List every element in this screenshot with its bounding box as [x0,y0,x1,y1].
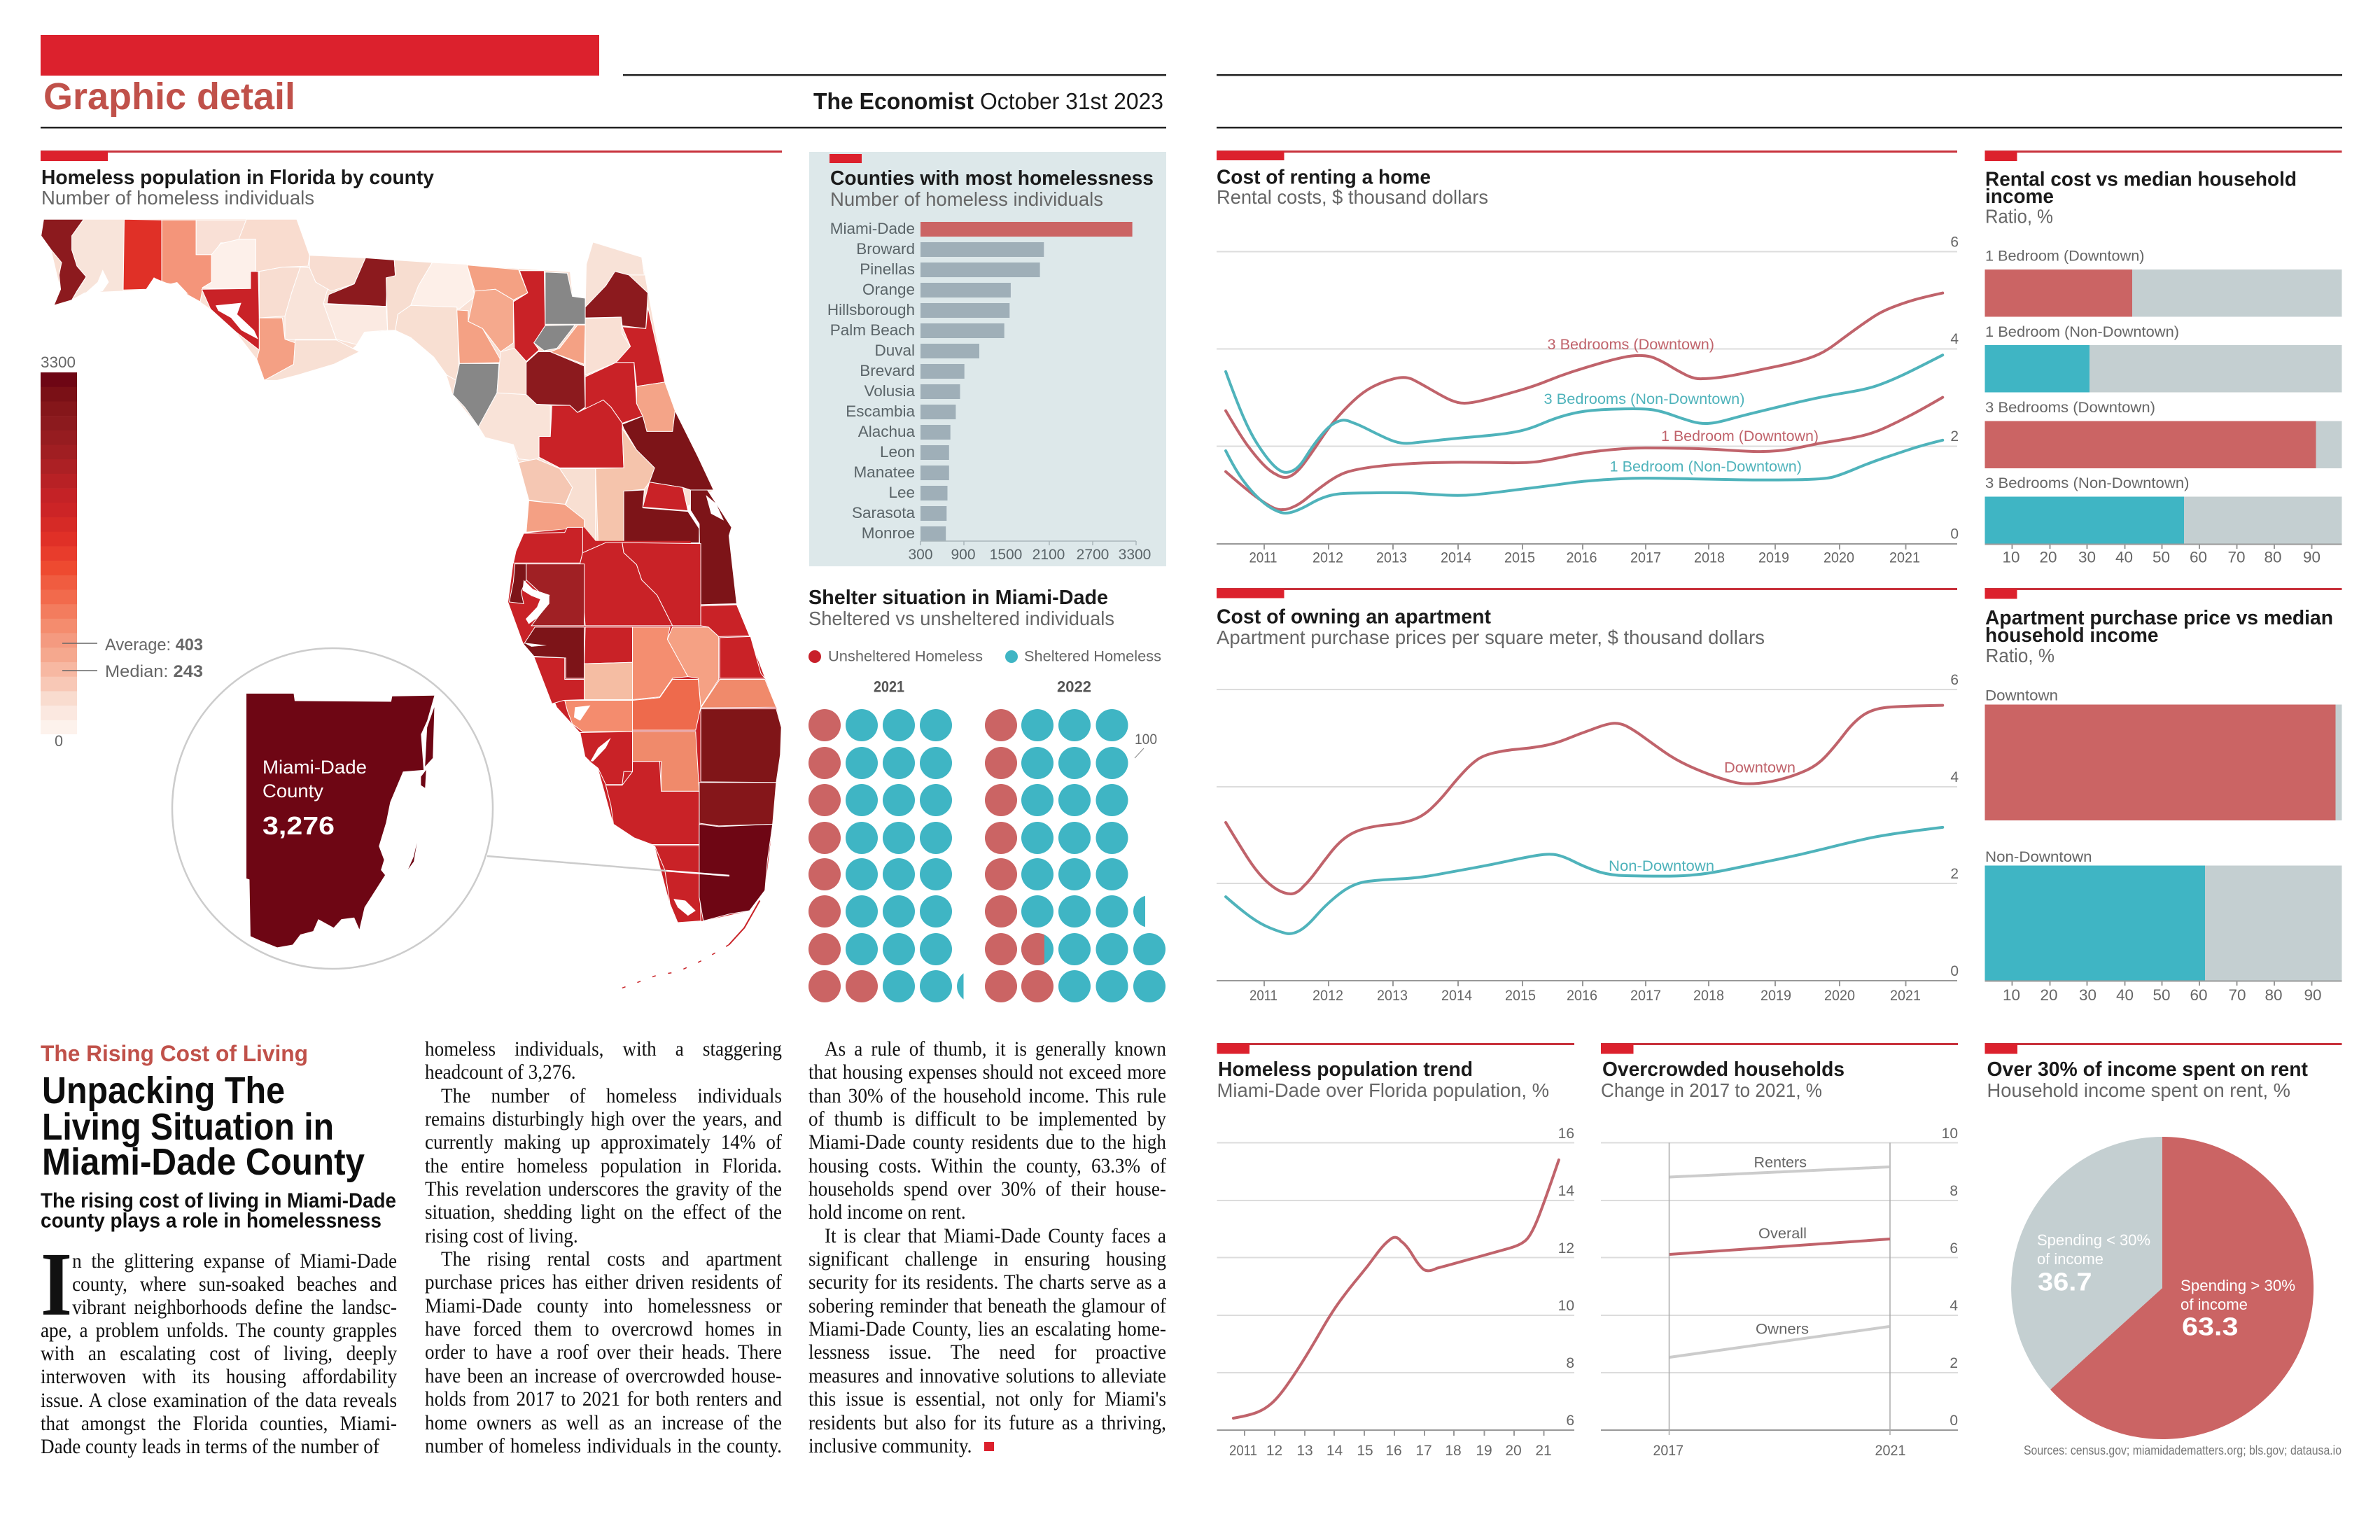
subheading: pie: Household income spent on rent, % [1987,1079,2290,1101]
stacked bars: rental ratio: 10 [2002,549,2020,566]
panel: homeless population trend [1217,1043,1574,1459]
headline: Unpacking The [42,1070,285,1112]
line chart: owning: 2016 [1567,988,1597,1004]
article column 1: county, where sun-soaked beaches and [72,1273,397,1296]
bar chart: counties: Miami-Dade [830,220,915,237]
article column 2: This revelation underscores the gravity of the [424,1178,781,1200]
panel: shelter situation [808,587,1166,1002]
bar chart: counties: Orange [862,281,915,298]
bar chart: counties: 1500 [990,547,1022,563]
slope chart: overcrowded: 2021 [1875,1443,1905,1459]
dot chart: 2022 [985,678,1166,1002]
panel: counties with most homelessness [809,152,1166,566]
slope chart: overcrowded: 2 [1949,1355,1958,1371]
article column 3 [808,1038,1166,1457]
article column 3: housing costs. Within the county, 63.3% of [808,1155,1166,1177]
heading: counties: Counties with most homelessness [830,167,1154,190]
callout text: Miami-Dade [262,757,367,778]
dot chart: 2021 [808,678,963,1002]
line chart: trend: 18 [1445,1443,1462,1459]
stacked bars: rental ratio [1985,248,2342,566]
line chart: renting: 2015 [1504,550,1535,566]
article column 2: holds from 2017 to 2021 for both renters and [424,1388,781,1410]
pie chart: Spending > 30% [2180,1277,2295,1294]
pie chart: 63.3 [2182,1312,2239,1341]
panel: cost of owning [1217,588,1959,1004]
line chart: renting: 2013 [1376,550,1407,566]
article column 1: interwoven with its housing affordability [41,1366,397,1388]
line chart: trend: 16 [1385,1443,1402,1459]
line chart: trend [1217,1126,1574,1459]
legend: median: Median: 243 [105,662,203,681]
line chart: renting: 2019 [1758,550,1789,566]
subheading: renting: Rental costs, $ thousand dollars [1217,186,1488,208]
stacked bars: apartment ratio [1985,687,2342,1004]
subheading: trend: Miami-Dade over Florida population, % [1217,1079,1549,1101]
line chart: trend: 19 [1476,1443,1492,1459]
article column 3: significant challenge in ensuring housing [808,1248,1166,1270]
line chart: renting: 1 Bedroom (Downtown) [1661,428,1819,444]
slope chart: overcrowded: 6 [1949,1240,1958,1256]
heading: shelter: Shelter situation in Miami-Dade [808,587,1108,609]
line chart: trend: 8 [1566,1355,1574,1371]
sources: Sources: census.gov; miamidadematters.org; bls.gov; datausa.io [2024,1443,2342,1457]
line chart: owning: 4 [1950,769,1959,785]
panel: Florida map [41,150,782,992]
line chart: owning: 2017 [1630,988,1661,1004]
panel: rental cost vs income [1985,150,2342,566]
bar chart: counties: Broward [856,240,915,258]
article column 2: remains disturbingly high over the years, and [424,1108,781,1130]
callout: Miami-Dade inset [172,648,729,969]
panel: rental cost vs income: income [1985,186,2054,208]
article column 2: number of homeless individuals in the county. [424,1435,781,1457]
article column 2: the entire homeless population in Florida. [424,1155,781,1177]
slope chart: overcrowded: Owners [1756,1322,1809,1337]
standfirst: The rising cost of living in Miami-Dade [41,1189,396,1212]
line chart: owning: 2018 [1693,988,1724,1004]
stacked bars: rental ratio: 3 Bedrooms (Non-Downtown) [1985,475,2190,491]
slope chart: overcrowded: 10 [1942,1126,1958,1142]
article column 2: have forced them to overcrowd homes in [424,1318,781,1340]
article column 3: sobering reminder that beneath the glamour of [808,1295,1166,1317]
bar chart: counties: 3300 [1119,547,1151,563]
stacked bars: apartment ratio: Downtown [1985,687,2058,704]
line chart: renting: 3 Bedrooms (Downtown) [1547,337,1714,353]
pie chart: 36.7 [2038,1267,2092,1296]
line chart: trend: 12 [1558,1240,1574,1256]
line chart: owning: 2021 [1890,988,1921,1004]
bar chart: counties: Brevard [860,362,915,379]
legend: shelter: Sheltered Homeless [1024,648,1161,665]
headline: Living Situation in [42,1106,334,1148]
subheading: apartment ratio: Ratio, % [1985,645,2054,666]
bar chart: counties: Sarasota [852,504,915,522]
line chart: owning: 2014 [1441,988,1472,1004]
end mark [984,1442,994,1451]
bar chart: counties: Hillsborough [827,301,915,318]
masthead red bar [41,35,599,76]
line chart: renting: 2012 [1312,550,1343,566]
icon: Miami-Dade county shape [246,694,434,947]
article column 3: It is clear that Miami-Dade County faces a [825,1225,1166,1247]
panel: cost of renting [1217,150,1959,566]
stacked bars: rental ratio: 50 [2152,549,2170,566]
bar chart: counties: Escambia [846,402,915,420]
panel: apartment price vs income [1985,588,2342,1004]
article column 3: measures and innovative solutions to alleviate [808,1365,1166,1387]
line chart: renting: 1 Bedroom (Non-Downtown) [1610,459,1802,475]
drop cap: I [41,1234,72,1335]
article column 1: that amongst the Florida counties, Miami- [41,1413,397,1435]
heading: overcrowded: Overcrowded households [1602,1058,1844,1081]
article column 2: rising cost of living. [424,1225,578,1247]
stacked bars: rental ratio: 3 Bedrooms (Downtown) [1985,400,2155,416]
section title: Graphic detail [43,76,295,118]
article column 2: The rising rental costs and apartment [441,1248,781,1270]
slope chart: overcrowded [1601,1126,1958,1459]
bar chart: counties: Leon [880,443,915,461]
stacked bars: apartment ratio: 70 [2228,986,2246,1004]
bar chart: counties: Alachua [858,423,915,440]
publication and date: October 31st 2023 [980,88,1163,114]
line chart: owning: 2020 [1824,988,1855,1004]
stacked bars: rental ratio: 30 [2078,549,2096,566]
line chart: trend: 2011 [1229,1443,1257,1459]
slope chart: overcrowded: 2017 [1653,1443,1684,1459]
line chart: owning [1217,672,1959,1004]
line chart: renting: 2017 [1630,550,1661,566]
article column 2: purchase prices has either driven residents of [424,1271,781,1294]
line chart: renting: 2011 [1249,550,1277,566]
choropleth map of Florida counties [41,219,781,992]
stacked bars: rental ratio: 90 [2303,549,2320,566]
subheading: owning: Apartment purchase prices per square meter, $ thousand dollars [1217,626,1765,648]
pie chart [2011,1137,2314,1439]
headline [42,1070,365,1183]
line chart: trend: 16 [1558,1126,1574,1142]
stacked bars: apartment ratio: 20 [2040,986,2058,1004]
bar chart: counties: Volusia [864,382,915,400]
line chart: renting: 6 [1950,234,1959,251]
pie chart: of income [2037,1250,2104,1268]
article column 2: have been an increase of overcrowded house- [424,1365,781,1387]
standfirst [41,1189,396,1232]
stacked bars: apartment ratio: 10 [2003,986,2020,1004]
line chart: renting: 0 [1950,526,1959,542]
line chart: trend: 14 [1558,1183,1574,1199]
standfirst: county plays a role in homelessness [41,1210,382,1232]
article column 3: lessness issue. The need for proactive [808,1341,1166,1364]
article column 3: security for its residents. The charts serve as a [808,1271,1166,1294]
slope chart: overcrowded: 0 [1949,1413,1958,1429]
article column 3: of thumb is difficult to be implemented by [808,1108,1166,1130]
line chart: renting: 2020 [1823,550,1854,566]
heading: rental ratio: Rental cost vs median household [1985,168,2297,190]
article heading block [41,1041,994,1451]
line chart: owning: 2019 [1760,988,1791,1004]
line chart: owning: 2 [1950,866,1959,882]
article column 3: that housing expenses should not exceed more [808,1061,1166,1084]
article column 1: vibrant neighborhoods define the landsc- [72,1296,397,1319]
subheading: rental ratio: Ratio, % [1985,206,2053,227]
bar chart: counties: Lee [888,484,915,501]
legend: colour scale: 3300 [41,354,76,371]
stacked bars: rental ratio: 70 [2227,549,2246,566]
article column 2: situation, shedding light on the effect of the [424,1201,781,1224]
stacked bars: rental ratio: 40 [2115,549,2133,566]
callout: Miami-Dade inset: 3,276 [262,811,335,840]
line chart: renting: 2018 [1694,550,1725,566]
bar chart: counties: 300 [908,547,933,563]
article column 3: this issue is essential, not only for Miami's [808,1388,1166,1410]
stacked bars: apartment ratio: Non-Downtown [1985,849,2092,865]
article column 1 [41,1250,397,1458]
article column 3: Miami-Dade County, lies an escalating home- [808,1318,1166,1340]
stacked bars: apartment ratio: 80 [2264,986,2283,1004]
line chart: renting [1217,234,1959,566]
dot chart: 2022: 2022 [1057,678,1091,696]
line chart: trend: 13 [1296,1443,1313,1459]
line chart: renting: 3 Bedrooms (Non-Downtown) [1544,391,1744,407]
line chart: renting: 4 [1950,331,1959,347]
bar chart: counties: Duval [874,342,915,359]
article column 3: Miami-Dade county residents due to the high [808,1131,1166,1154]
line chart: trend: 21 [1535,1443,1552,1459]
heading: map: Homeless population in Florida by county [41,167,434,189]
subheading: counties: Number of homeless individuals [830,188,1103,210]
article column 2: The number of homeless individuals [441,1085,781,1107]
panel: income spent on rent [1985,1043,2342,1457]
line chart: owning: 2012 [1312,988,1343,1004]
line chart: trend: 20 [1505,1443,1522,1459]
article column 1: n the glittering expanse of Miami-Dade [72,1250,397,1273]
legend: shelter: Unsheltered Homeless [828,648,983,665]
line chart: owning: 2015 [1505,988,1536,1004]
line chart: trend: 14 [1326,1443,1343,1459]
stacked bars: apartment ratio: 60 [2190,986,2208,1004]
headline: Miami-Dade County [42,1141,365,1183]
legend: colour scale [41,354,203,750]
pie chart: Spending < 30% [2037,1231,2150,1249]
stacked bars: rental ratio: 20 [2039,549,2057,566]
panel: overcrowded households [1601,1043,1958,1459]
callout: Miami-Dade inset: County [262,780,323,802]
line chart: trend: 17 [1415,1443,1432,1459]
slope chart: overcrowded: 4 [1949,1298,1958,1314]
line chart: trend: 15 [1357,1443,1373,1459]
legend: average: Average: 403 [105,636,203,654]
line chart: trend: 12 [1266,1443,1282,1459]
bar chart: counties: Pinellas [860,260,915,278]
line chart: renting: 2014 [1441,550,1471,566]
stacked bars: apartment ratio: 30 [2079,986,2096,1004]
line chart: owning: 0 [1950,963,1959,979]
article column 3: As a rule of thumb, it is generally known [825,1038,1166,1060]
article column 2: order to have a roof over their heads. There [424,1341,781,1364]
stacked bars: apartment ratio: 50 [2152,986,2171,1004]
stacked bars: apartment ratio: 40 [2116,986,2134,1004]
stacked bars: rental ratio: 80 [2264,549,2282,566]
article column 1: ape, a problem unfolds. The county grapples [41,1320,397,1342]
article column 3: households spend over 30% of their house- [808,1178,1166,1200]
stacked bars: rental ratio: 60 [2190,549,2207,566]
slope chart: overcrowded: 8 [1949,1183,1958,1199]
article column 3: than 30% of the household income. This rule [808,1085,1166,1107]
heading: renting: Cost of renting a home [1217,167,1431,189]
article column 2: home owners as well as an increase of the [424,1411,781,1434]
pie chart: of income [2180,1296,2248,1313]
slope chart: overcrowded: Renters [1754,1155,1807,1170]
article column 3: hold income on rent. [808,1201,966,1224]
line chart: owning: 6 [1950,672,1959,688]
heading: trend: Homeless population trend [1218,1058,1473,1081]
bar chart: counties: 2700 [1077,547,1109,563]
article column 1: Dade county leads in terms of the number of [41,1436,379,1458]
line chart: trend: 10 [1558,1298,1574,1314]
line chart: renting: 2021 [1889,550,1920,566]
subheading: map: Number of homeless individuals [41,187,314,209]
slope chart: overcrowded: Overall [1758,1226,1807,1242]
article column 1: issue. A close examination of the data reveals [41,1390,397,1412]
article column 2: homeless individuals, with a staggering [424,1038,781,1060]
article column 3: residents but also for its future as a thriving, [808,1411,1166,1434]
kicker: The Rising Cost of Living [41,1041,308,1066]
subheading: overcrowded: Change in 2017 to 2021, % [1601,1079,1822,1101]
subheading: shelter: Sheltered vs unsheltered individuals [808,608,1114,629]
line chart: renting: 2016 [1567,550,1597,566]
stacked bars: apartment ratio: 90 [2304,986,2322,1004]
dot chart: 2021: 2021 [874,678,904,696]
bar chart: counties [827,220,1151,563]
article column 1: with an escalating cost of living, deeply [41,1343,397,1365]
stacked bars: rental ratio: 1 Bedroom (Non-Downtown) [1985,324,2179,340]
bar chart: counties: Palm Beach [830,321,915,339]
line chart: owning: 2013 [1377,988,1408,1004]
heading: pie: Over 30% of income spent on rent [1987,1058,2309,1081]
line chart: owning: 2011 [1250,988,1278,1004]
bar chart: counties: 2100 [1032,547,1065,563]
stacked bars: rental ratio: 1 Bedroom (Downtown) [1985,248,2145,265]
legend: colour scale: 0 [55,732,63,750]
publication and date: The Economist [813,88,974,114]
heading: owning: Cost of owning an apartment [1217,606,1492,629]
article column 2: headcount of 3,276. [424,1061,575,1084]
panel: apartment price vs income: household income [1985,624,2159,647]
legend: shelter [808,648,1161,665]
dot chart: 2022: 100 [1135,732,1157,748]
line chart: owning: Downtown [1724,760,1795,776]
bar chart: counties: Monroe [862,524,915,542]
bar chart: counties: 900 [951,547,976,563]
article column 3: inclusive community. [808,1435,972,1457]
line chart: owning: Non-Downtown [1609,858,1714,874]
article column 2: Miami-Dade county into homelessness or [424,1295,781,1317]
line chart: renting: 2 [1950,428,1959,444]
bar chart: counties: Manatee [853,463,915,481]
line chart: trend: 6 [1566,1413,1574,1429]
article column 2: currently making up approximately 14% of [424,1131,781,1154]
masthead [41,35,2342,129]
article column 2 [424,1038,782,1457]
heading: apartment ratio: Apartment purchase price vs median [1985,607,2333,629]
